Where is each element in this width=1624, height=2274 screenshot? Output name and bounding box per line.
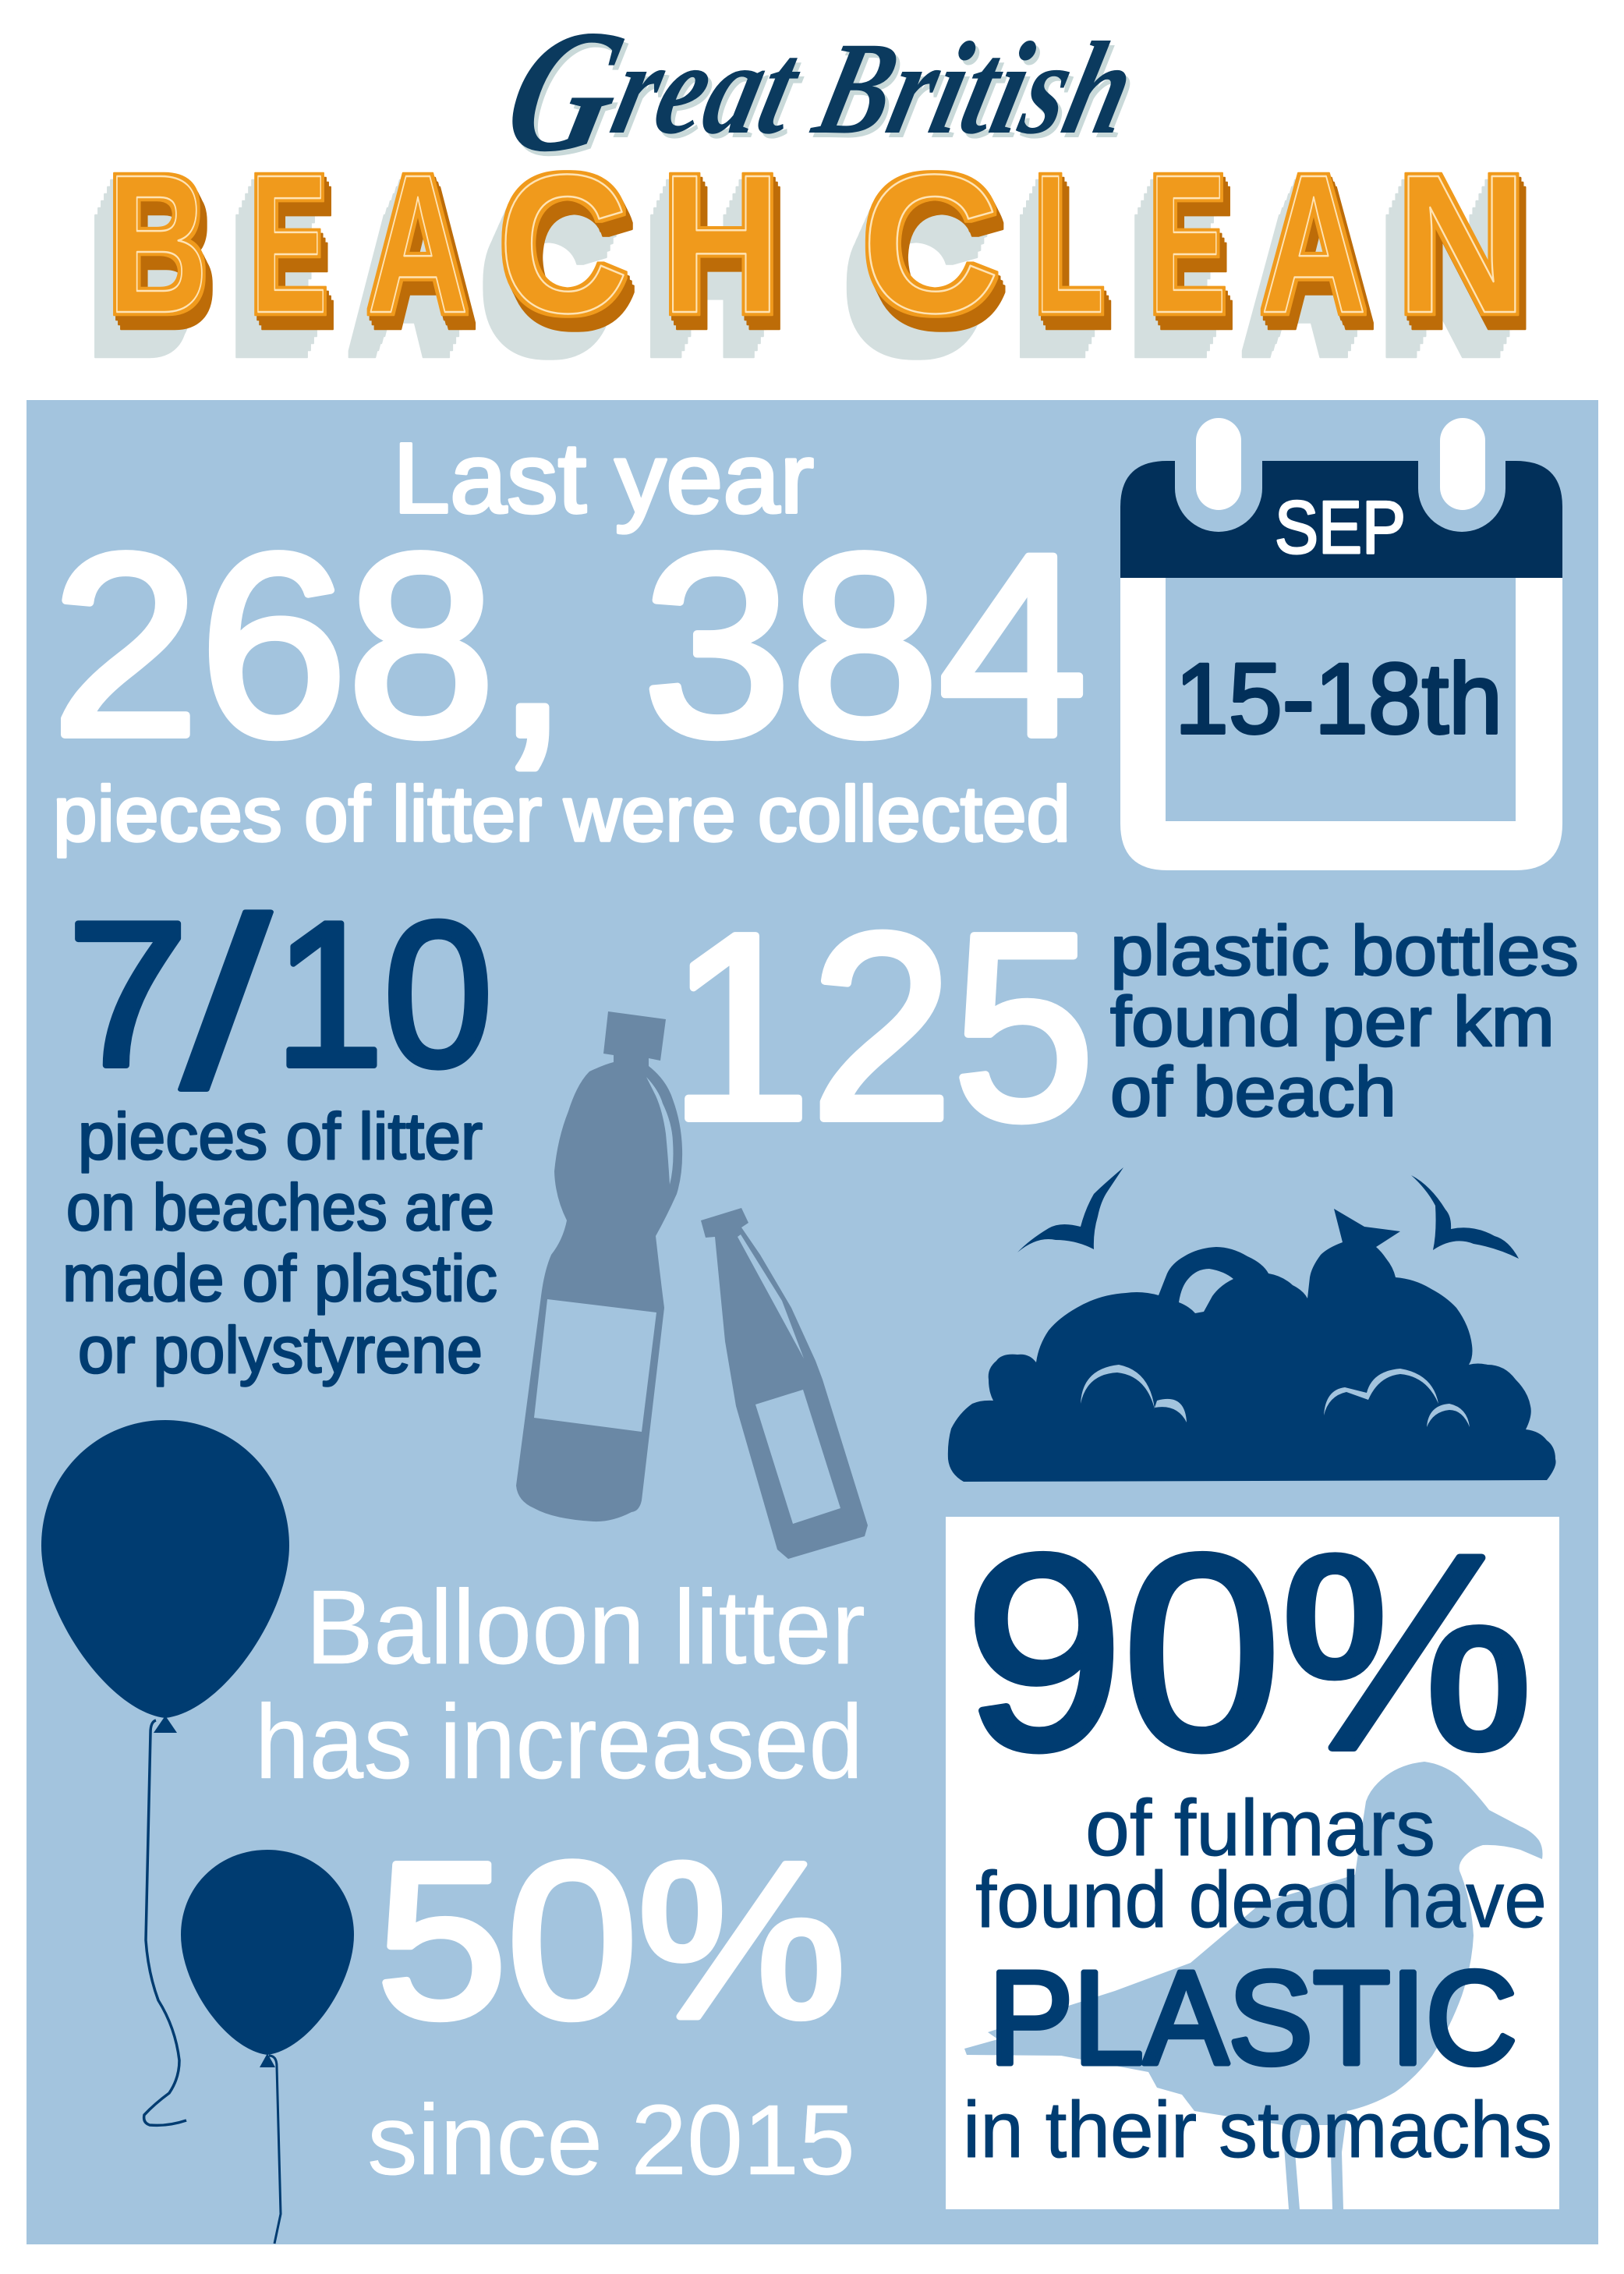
text: PLASTIC: PLASTIC — [989, 1944, 1517, 2092]
icon: calendar — [1120, 418, 1562, 870]
stat: 50%: 50% — [377, 1817, 846, 2064]
text: of fulmars: of fulmars — [1085, 1783, 1435, 1872]
text: pieces of litter on beaches are made of plastic or polystyrene — [62, 1100, 497, 1387]
stat: 7/10 — [67, 868, 493, 1139]
icon: gull silhouette — [964, 1762, 1542, 2209]
text: since 2015: since 2015 — [367, 2084, 855, 2196]
title: Beach Clean: A — [367, 133, 469, 354]
bag handle gap — [1179, 1269, 1233, 1313]
text: pieces of litter on beaches are made of plastic or polystyrene: made of plastic — [62, 1241, 497, 1315]
date label: 15-18th — [1175, 643, 1502, 755]
title: Beach Clean: N — [1396, 133, 1527, 354]
text: pieces of litter on beaches are made of plastic or polystyrene: pieces of litter — [78, 1100, 483, 1173]
title: Beach Clean: L — [1035, 133, 1104, 354]
stat: 90%: 90% — [965, 1499, 1533, 1807]
text: Balloon litter has increased — [255, 1568, 865, 1801]
title: Great British — [489, 0, 1153, 188]
stat: 268, 384: 268, 384 — [51, 501, 1087, 790]
balloon knot — [154, 1716, 177, 1733]
small balloon string — [269, 2056, 281, 2244]
calendar header — [1120, 461, 1562, 578]
stat: 7/10: 7 — [67, 879, 189, 1109]
left binding ring — [1175, 418, 1262, 532]
panel: fulmar statistic — [946, 1499, 1559, 2209]
right binding ring — [1418, 418, 1505, 532]
text: pieces of litter on beaches are made of plastic or polystyrene: or polystyrene — [78, 1313, 483, 1387]
stat: 7/10: 10 — [274, 879, 493, 1109]
text: pieces of litter were collected: pieces of litter were collected — [53, 770, 1070, 858]
text: Last year: Last year — [393, 423, 814, 534]
text: plastic bottles found per km of beach: found per km — [1110, 983, 1555, 1061]
text: in their stomachs: in their stomachs — [963, 2085, 1552, 2174]
icon: pile of rubbish bags — [948, 1209, 1556, 1482]
glass bottle label — [755, 1390, 840, 1524]
icon: large balloon — [41, 1420, 289, 2125]
text: Balloon litter has increased: Balloon litter — [306, 1568, 865, 1686]
title: Beach Clean: H — [662, 133, 780, 354]
text: found dead have: found dead have — [975, 1855, 1547, 1944]
icon: left seagull — [1017, 1167, 1123, 1252]
icon: glass bottle — [701, 1208, 868, 1559]
text: pieces of litter on beaches are made of plastic or polystyrene: on beaches are — [66, 1171, 494, 1244]
title: Beach Clean: B — [108, 133, 208, 354]
title: Beach Clean: E — [1149, 133, 1226, 354]
icon: large plastic bottle — [516, 1011, 682, 1521]
text: plastic bottles found per km of beach: plastic bottles — [1110, 912, 1579, 990]
text: Balloon litter has increased: has increased — [255, 1683, 863, 1801]
bottle highlight — [646, 1077, 674, 1185]
calendar body — [1120, 578, 1562, 870]
panel: blue background — [27, 400, 1598, 2244]
glass bottle highlight — [738, 1234, 804, 1358]
title: Beach Clean: C — [862, 133, 1000, 354]
stat: 125: 125 — [669, 879, 1095, 1175]
small balloon knot — [260, 2053, 275, 2067]
bottle label — [534, 1299, 656, 1432]
icon: small balloon — [181, 1850, 354, 2244]
month label: SEP — [1275, 486, 1406, 569]
stat: 7/10: / — [181, 868, 271, 1139]
title: Beach Clean — [108, 133, 1527, 354]
text: plastic bottles found per km of beach — [1110, 912, 1579, 1132]
title: Beach Clean: E — [250, 133, 327, 354]
balloon string — [144, 1720, 186, 2125]
calendar page — [1166, 578, 1516, 821]
title: Great British: reat British — [600, 15, 1148, 161]
icon: right seagull — [1411, 1175, 1519, 1259]
title: Beach Clean: A — [1261, 133, 1367, 354]
text: plastic bottles found per km of beach: of beach — [1110, 1054, 1396, 1132]
title: Beach Clean: C — [498, 133, 628, 354]
bag highlights — [1081, 1365, 1470, 1427]
